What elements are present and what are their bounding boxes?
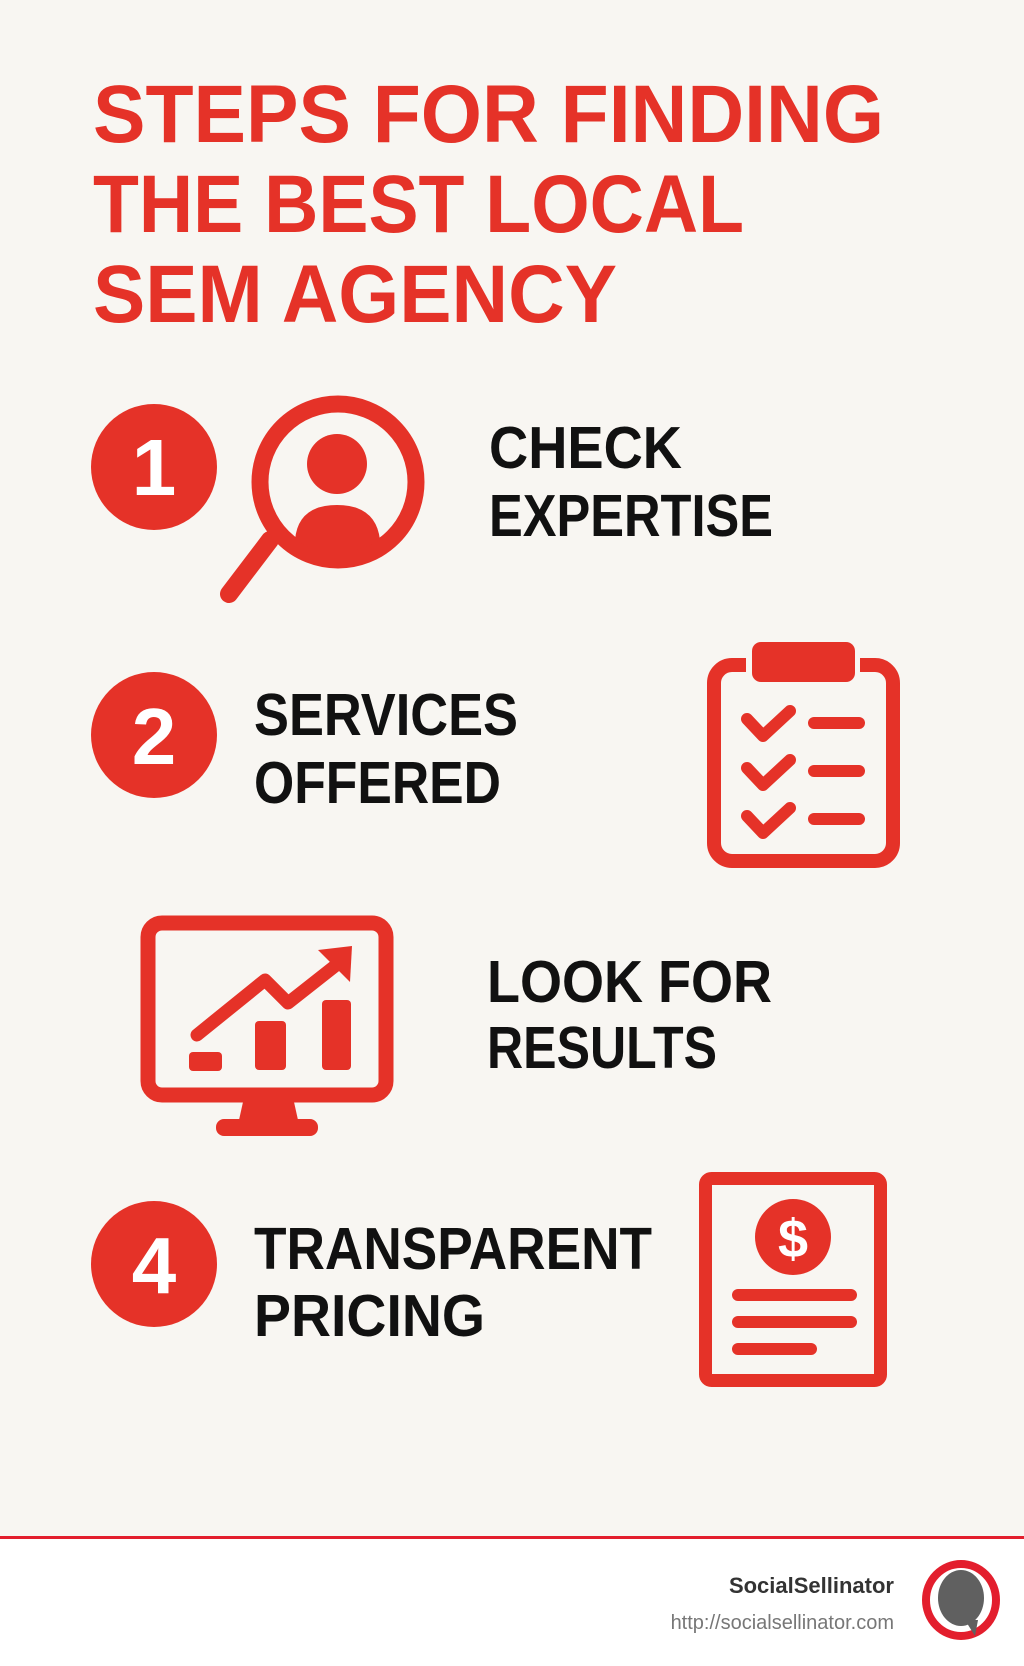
title: STEPS FOR FINDING [93,69,884,160]
step 3 [148,923,772,1136]
step 4 label: PRICING [254,1283,485,1349]
step 3 label: RESULTS [487,1015,717,1081]
number badge 4 [91,1201,217,1327]
number badge 4: 4 [132,1221,177,1310]
footer brand text: http://socialsellinator.com [671,1612,894,1634]
icon: invoice with dollar: $ [778,1209,808,1269]
step 1 label: EXPERTISE [489,483,773,549]
title: THE BEST LOCAL [93,159,744,250]
step 2 label [254,682,518,816]
step 3 label: LOOK FOR [487,949,772,1015]
number badge 2 [91,672,217,798]
icon: clipboard checklist [714,638,893,861]
step 4 label [254,1216,652,1349]
step 4 [91,1178,880,1380]
footer [0,1536,1024,1666]
icon: logo [926,1564,996,1636]
step 1 [91,404,773,594]
step 1 label: CHECK [489,415,682,481]
icon: invoice with dollar [706,1178,880,1380]
title [93,69,884,340]
step 2 label: SERVICES [254,682,518,748]
icon: magnifier with person [229,404,416,594]
footer brand text: SocialSellinator [729,1573,894,1598]
title: SEM AGENCY [93,249,617,340]
step 2 label: OFFERED [254,750,501,816]
number badge 1: 1 [132,423,176,512]
step 4 label: TRANSPARENT [254,1216,652,1282]
step 2 [91,638,893,861]
number badge 2: 2 [132,692,176,781]
icon: monitor with chart [148,923,386,1136]
step 3 label [487,949,772,1081]
number badge 1 [91,404,217,530]
step 1 label [489,415,773,549]
footer brand text [671,1573,894,1634]
